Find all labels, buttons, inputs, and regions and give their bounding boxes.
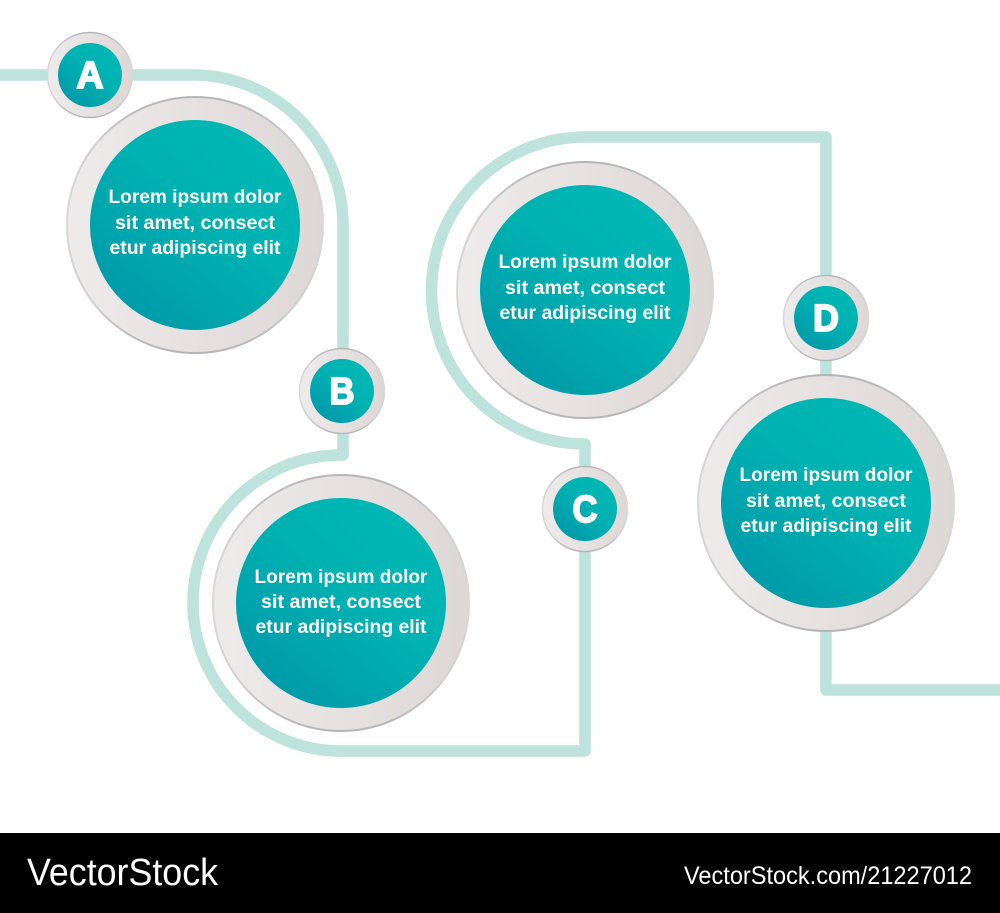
badge A: A: [76, 55, 104, 97]
panel: circle C text: Lorem ipsum dolor: [498, 251, 672, 273]
panel: circle B text: sit amet, consect: [261, 591, 422, 613]
panel: circle B text: Lorem ipsum dolor: [254, 566, 428, 588]
panel: circle D text: [698, 375, 954, 631]
panel: circle C text: etur adipiscing elit: [500, 302, 671, 324]
panel: circle C text: sit amet, consect: [505, 277, 666, 299]
panel: circle C text: [457, 162, 713, 418]
badge D: D: [813, 298, 839, 340]
badge B: [300, 348, 384, 434]
footer bar: VectorStock: [27, 852, 219, 894]
panel: circle A text: etur adipiscing elit: [110, 237, 281, 259]
panel: circle D text: sit amet, consect: [746, 490, 907, 512]
connector line: [0, 75, 1000, 751]
panel: circle B text: etur adipiscing elit: [256, 616, 427, 638]
badge C: C: [572, 489, 598, 531]
badge D: [784, 276, 868, 360]
panel: circle B text: [213, 475, 469, 731]
footer bar: [0, 833, 1000, 913]
panel: circle D text: Lorem ipsum dolor: [740, 464, 913, 486]
panel: circle A text: Lorem ipsum dolor: [108, 186, 282, 208]
footer bar: VectorStock.com/21227012: [684, 862, 972, 890]
badge A: [48, 32, 132, 118]
panel: circle A text: sit amet, consect: [115, 212, 276, 234]
badge B: B: [330, 371, 354, 413]
badge C: [542, 466, 628, 552]
panel: circle A text: [67, 97, 323, 353]
panel: circle D text: etur adipiscing elit: [740, 515, 912, 537]
